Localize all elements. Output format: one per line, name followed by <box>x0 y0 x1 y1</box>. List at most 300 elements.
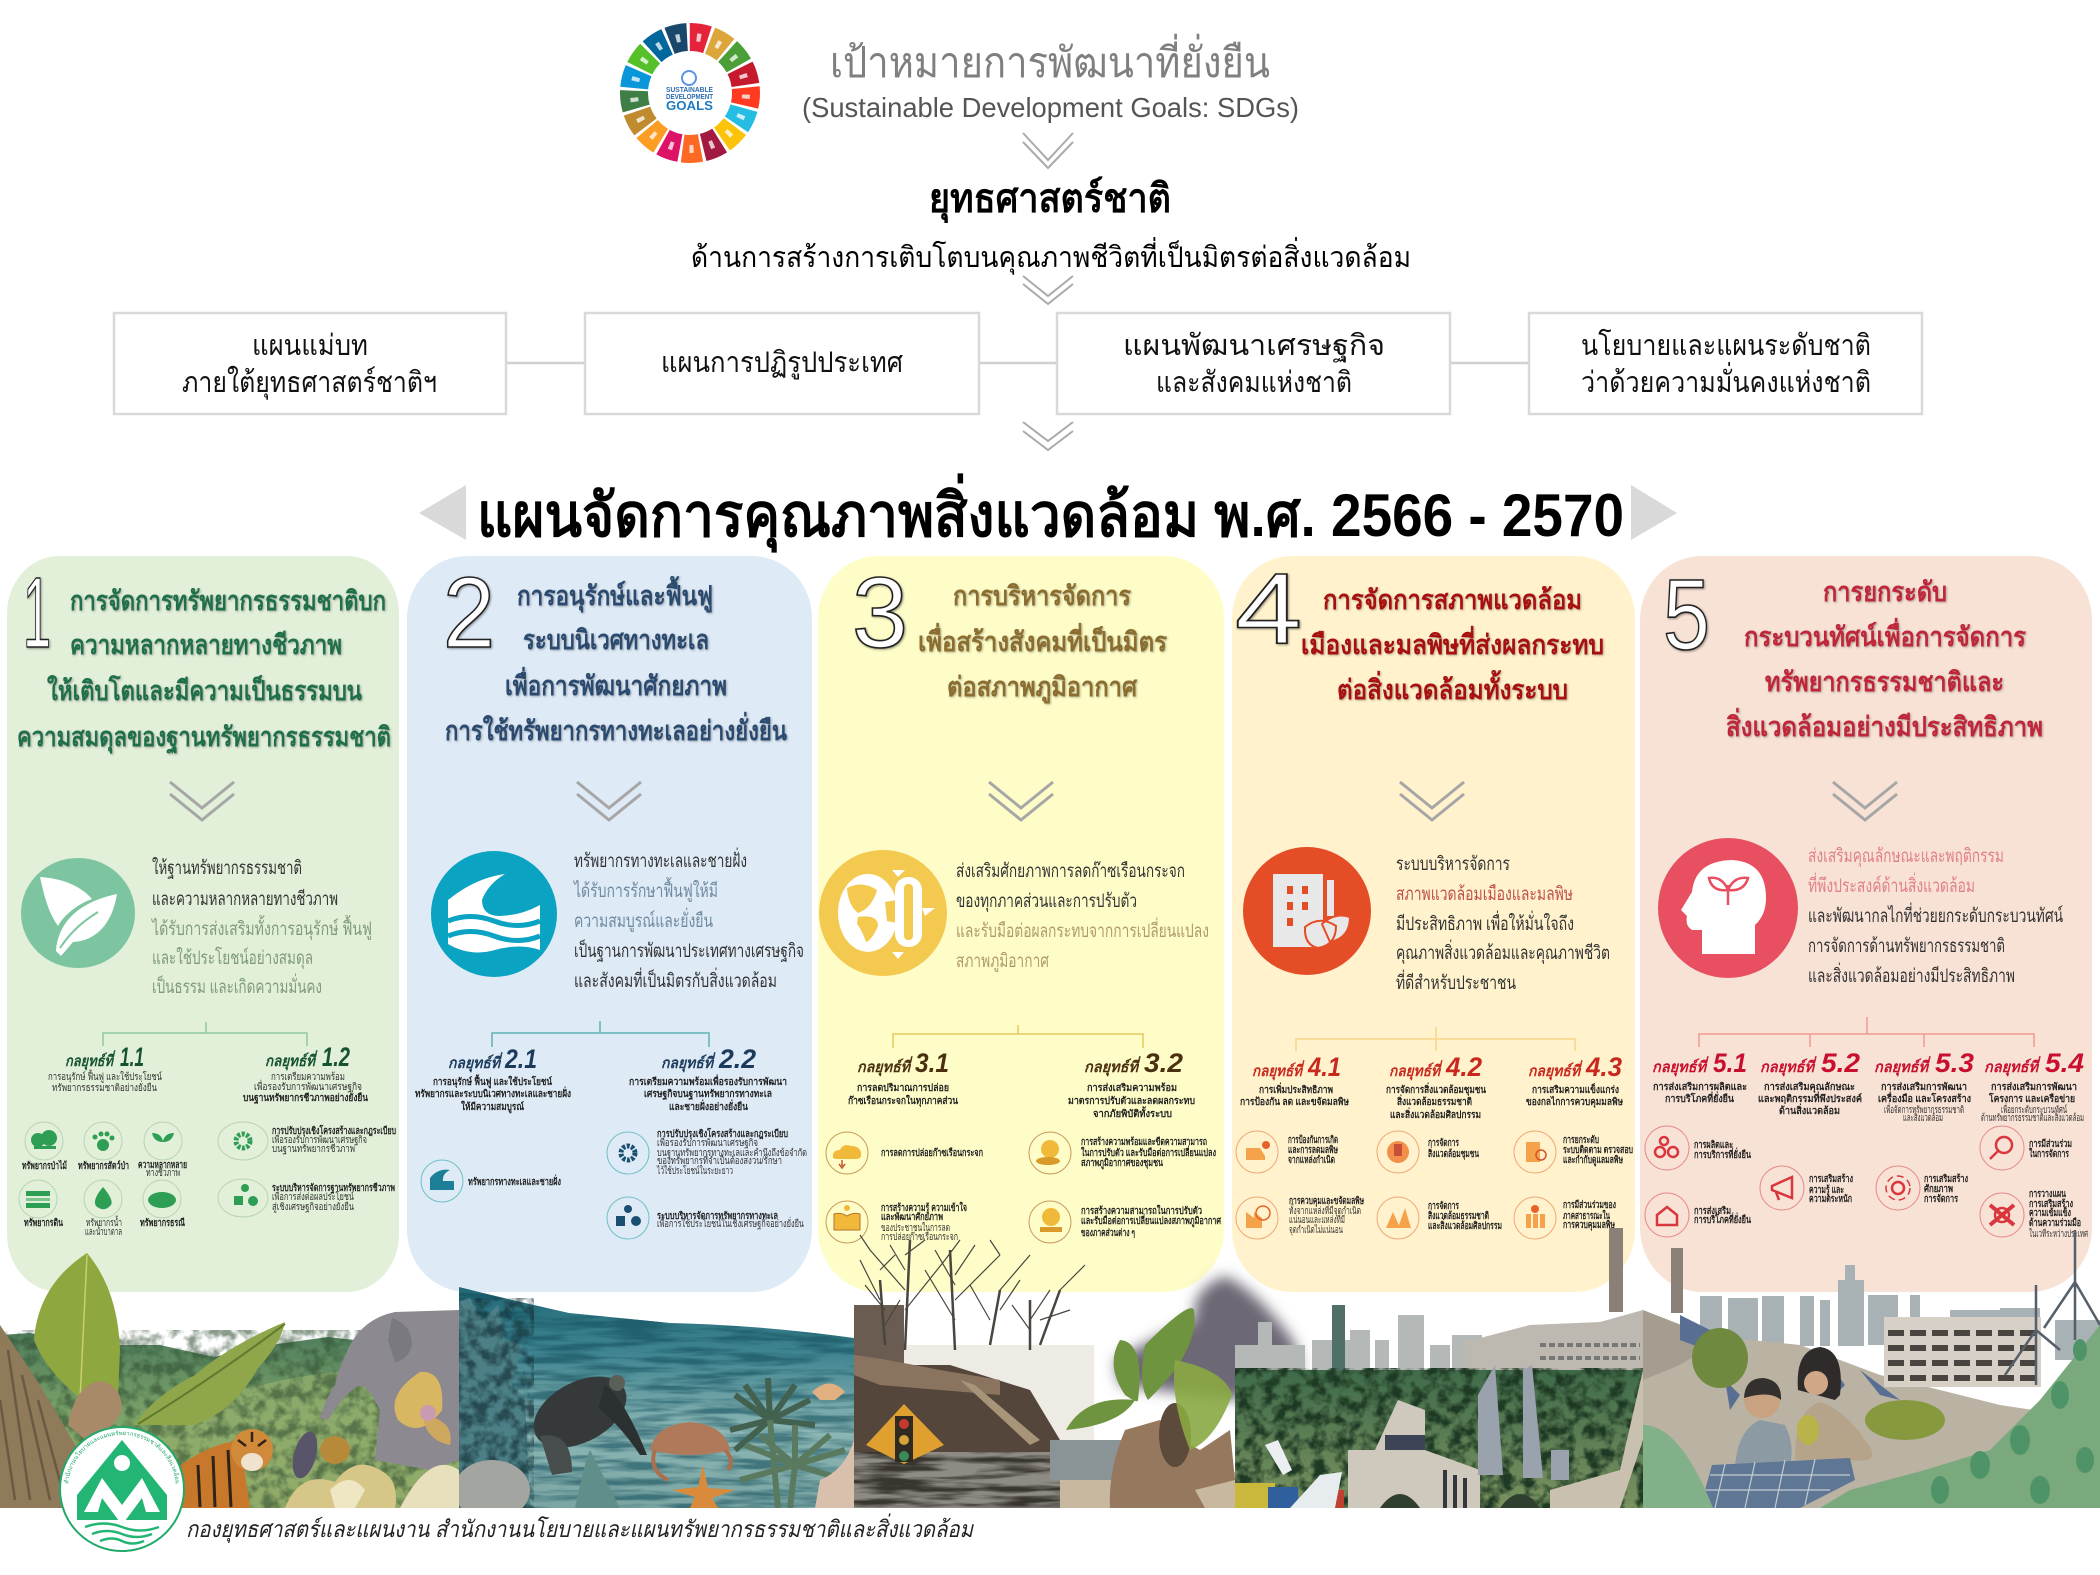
strategy 2.1 <box>415 1044 571 1114</box>
water texture <box>854 1452 1144 1508</box>
text: marine resource management: ระบบบริหารจัดการทรัพยากรทางทะเล <box>657 1210 778 1222</box>
body text panel 3: และรับมือต่อผลกระทบจากการเปลี่ยนแปลง <box>956 917 1209 942</box>
text: structural regulation: เพื่อรองรับการพัฒนาเศรษฐกิจ <box>657 1135 758 1149</box>
text: sector capacity: การสร้างความสามารถในการปรับตัว <box>1081 1204 1202 1217</box>
strategy 3.1: 3.1 <box>915 1048 949 1078</box>
text: pollution control: ทั้งจากแหล่งที่มีจุดกำเนิด <box>1289 1203 1361 1217</box>
heading panel 2 <box>445 575 787 746</box>
panel 5: paradigm shift <box>1640 556 2092 1292</box>
strategy 3.1: กลยุทธ์ที่ <box>857 1056 913 1077</box>
tree connector panel 3 <box>893 1025 1143 1048</box>
tiger <box>175 1429 273 1508</box>
panel 4: urban environment and pollution <box>1232 553 1635 1292</box>
body text panel 1 <box>151 857 372 998</box>
text: monitoring upgrade: การยกระดับ <box>1563 1134 1599 1146</box>
body text panel 2: และสังคมที่เป็นมิตรกับสิ่งแวดล้อม <box>574 967 777 992</box>
cracked ground <box>1060 1472 1235 1508</box>
body text panel 5 <box>1808 846 2063 987</box>
heading panel 3: ต่อสภาพภูมิอากาศ <box>947 672 1138 704</box>
box: reform plan <box>585 313 979 414</box>
box: economic and social plan: แผนพัฒนาเศรษฐกิจ <box>1123 330 1385 363</box>
elephant ear <box>388 1318 412 1362</box>
subheading: strategy topic: ด้านการสร้างการเติบโตบนคุณภาพชีวิตที่เป็นมิตรต่อสิ่งแวดล้อม <box>691 237 1411 275</box>
strategy 5.3: และสิ่งแวดล้อม <box>1903 1110 1943 1124</box>
text: community capacity: การสร้างความพร้อมและขีดความสามารถ <box>1081 1136 1207 1148</box>
bee <box>288 1429 350 1481</box>
banana leaf upright <box>34 1253 120 1400</box>
text: knowledge building <box>881 1201 967 1243</box>
coral bottom <box>454 1460 530 1520</box>
strategy 5.1 <box>1652 1048 1747 1105</box>
turtle <box>522 1362 647 1475</box>
strategy 3.2: มาตรการปรับตัวและลดผลกระทบ <box>1068 1095 1195 1107</box>
rooftop left <box>1643 1310 1720 1380</box>
strategy 3.2 <box>1068 1048 1195 1120</box>
strategy 5.2 <box>1758 1048 1862 1117</box>
body text panel 2 <box>573 847 804 992</box>
SDG wheel logo: DEVELOPMENT <box>666 94 714 101</box>
text: international cooperation <box>2029 1189 2088 1240</box>
strategy 1.1: ทรัพยากรธรรมชาติอย่างยั่งยืน <box>52 1080 157 1094</box>
body text panel 4: ระบบบริหารจัดการ <box>1396 854 1510 875</box>
text: pollution control <box>1289 1195 1364 1236</box>
text: biological resource management: เพื่อการส่งต่อผลประโยชน์ <box>272 1189 354 1203</box>
photo collage: ocean and marine life <box>454 1287 854 1520</box>
strategy 2.1: การอนุรักษ์ ฟื้นฟู และใช้ประโยชน์ <box>433 1074 552 1089</box>
heading panel 3: เพื่อสร้างสังคมที่เป็นมิตร <box>918 622 1167 657</box>
text: knowledge and awareness: ความรู้ และ <box>1809 1184 1844 1197</box>
light backdrop blending into smoke <box>854 1345 1094 1508</box>
strategy 2.1: ให้มีความสมบูรณ์ <box>461 1100 525 1114</box>
icon: marine resources <box>421 1160 463 1202</box>
heading panel 3: การบริหารจัดการ <box>953 581 1131 611</box>
strategy 5.3: 5.3 <box>1935 1048 1974 1078</box>
box: master plan: แผนแม่บท <box>252 330 368 362</box>
strategy 5.3 <box>1874 1048 1974 1124</box>
text: pollution prevention: จากแหล่งกำเนิด <box>1288 1154 1335 1166</box>
text: sustainable production: การบริการที่ยั่งยืน <box>1694 1147 1751 1161</box>
tree connector panel 2 <box>492 1021 709 1047</box>
SDG wheel logo: GOALS <box>666 98 713 113</box>
strategy 5.3: เครื่องมือ และโครงสร้าง <box>1878 1091 1971 1105</box>
skyscrapers <box>1478 1365 1569 1480</box>
resource icons grid <box>19 1122 187 1238</box>
text: public participation <box>1563 1199 1616 1231</box>
seaweed <box>575 1450 620 1508</box>
tree connector panel 5 <box>1699 1017 2034 1047</box>
text: knowledge and awareness: การเสริมสร้าง <box>1809 1173 1853 1185</box>
strategy 2.2: เศรษฐกิจบนฐานทรัพยากรทางทะเล <box>644 1088 772 1100</box>
text: management capacity: การเสริมสร้าง <box>1924 1173 1968 1185</box>
text: sector capacity <box>1081 1204 1221 1239</box>
text: community environment <box>1428 1137 1479 1160</box>
strategy 2.1: 2.1 <box>504 1044 537 1074</box>
strategy 3.1: การลดปริมาณการปล่อย <box>857 1082 949 1094</box>
text: biological resource management: ระบบบริหารจัดการฐานทรัพยากรชีวภาพ <box>272 1182 395 1194</box>
strategy 4.3: 4.3 <box>1585 1052 1622 1082</box>
text: structure and regulation: การปรับปรุงเชิงโครงสร้างและกฎระเบียบ <box>272 1124 396 1137</box>
strategy 5.2: 5.2 <box>1821 1048 1860 1078</box>
strategy 5.4: 5.4 <box>2045 1048 2084 1078</box>
text: international cooperation: การวางแผน <box>2029 1189 2066 1200</box>
text: pollution prevention <box>1288 1134 1338 1166</box>
text: management capacity: การจัดการ <box>1924 1193 1958 1205</box>
chimney right <box>1671 1248 1683 1313</box>
heading panel 3 <box>918 581 1167 704</box>
diagonal leaf vein <box>138 1324 285 1424</box>
trunk bark <box>0 1350 65 1500</box>
box: national security policy: ว่าด้วยความมั่นคงแห่งชาติ <box>1581 362 1871 399</box>
strategy 5.3: กลยุทธ์ที่ <box>1874 1056 1931 1077</box>
strategy 4.2: สิ่งแวดล้อมธรรมชาติ <box>1397 1094 1472 1108</box>
strategy 2.2: และชายฝั่งอย่างยั่งยืน <box>669 1099 748 1113</box>
text: community environment: การจัดการ <box>1428 1137 1459 1149</box>
body text panel 4: มีประสิทธิภาพ เพื่อให้มั่นใจถึง <box>1396 910 1574 935</box>
arrow panel 4 <box>1400 782 1464 820</box>
strategy 1.2: เพื่อรองรับการพัฒนาเศรษฐกิจ <box>254 1079 362 1093</box>
number 4: 4 <box>1235 553 1302 665</box>
strategy 5.4 <box>1981 1048 2084 1124</box>
text: structural regulation: ไว้ใช้ประโยชน์ในระยะยาว <box>656 1164 733 1177</box>
banana leaf vein <box>80 1255 87 1400</box>
heading panel 1: การจัดการทรัพยากรธรรมชาติบก <box>70 586 386 616</box>
heading panel 2: เพื่อการพัฒนาศักยภาพ <box>505 666 727 701</box>
icon: management 1.2 <box>218 1179 268 1217</box>
heading panel 5: การยกระดับ <box>1823 577 1947 607</box>
rock <box>815 1440 854 1508</box>
dark trees foreground <box>1380 1494 1540 1508</box>
body text panel 2: ความสมบูรณ์และยั่งยืน <box>574 907 713 932</box>
text: management capacity <box>1924 1173 1968 1205</box>
plant leaves <box>1066 1308 1232 1450</box>
heading panel 5: ทรัพยากรธรรมชาติและ <box>1765 667 2004 697</box>
rooftops <box>1643 1310 2100 1508</box>
text: knowledge and awareness <box>1809 1173 1853 1205</box>
strategy 2.2: กลยุทธ์ที่ <box>661 1052 716 1073</box>
tall tower <box>1332 1305 1345 1373</box>
strategy 5.4: โครงการ และเครือข่าย <box>1988 1092 2075 1105</box>
body text panel 1: และใช้ประโยชน์อย่างสมดุล <box>152 946 313 970</box>
text: participation in management: ในการจัดการ <box>2029 1147 2069 1160</box>
tube <box>1265 1440 1292 1475</box>
wind turbines <box>2005 1230 2100 1385</box>
arrow panel 5 <box>1833 782 1897 820</box>
leaf clusters <box>1931 1339 2094 1504</box>
coral fronds <box>459 1298 530 1508</box>
text: sector capacity: และรับมือต่อการเปลี่ยนแปลงสภาพภูมิอากาศ <box>1081 1213 1221 1228</box>
collapsed planks <box>960 1380 1040 1445</box>
text: reduce greenhouse gas: การลดการปล่อยก๊าซเรือนกระจก <box>881 1147 983 1159</box>
panel 2: marine ecosystem <box>407 556 812 1292</box>
number 1: 1 <box>23 557 51 669</box>
resource icons grid: ทรัพยากรธรณี <box>140 1217 186 1229</box>
text: monitoring upgrade: และกำกับดูแลมลพิษ <box>1563 1154 1623 1167</box>
crab <box>650 1422 731 1480</box>
tower structure <box>854 1305 904 1365</box>
text: community capacity <box>1081 1136 1216 1170</box>
strategy 4.3: การเสริมความแข็งแกร่ง <box>1532 1082 1619 1096</box>
text: biological resource management: สู่เชิงเศรษฐกิจอย่างยั่งยืน <box>272 1199 354 1213</box>
body text panel 2: ทรัพยากรทางทะเลและชายฝั่ง <box>574 847 747 872</box>
factory <box>1465 1310 1643 1375</box>
body text panel 3: ของทุกภาคส่วนและการปรับตัว <box>956 891 1137 913</box>
icon: gears 2.2 <box>607 1132 649 1174</box>
flood water <box>854 1452 1144 1508</box>
icon: wave <box>431 851 557 977</box>
strategy 1.2: การเตรียมความพร้อม <box>271 1071 345 1083</box>
text: international cooperation: การเสริมสร้าง <box>2029 1198 2073 1210</box>
body text panel 4: ที่ดีสำหรับประชาชน <box>1396 969 1516 994</box>
strategy 5.2: การส่งเสริมคุณลักษณะ <box>1764 1081 1855 1093</box>
strategy 5.3: การส่งเสริมการพัฒนา <box>1881 1081 1967 1093</box>
arrow panel 2 <box>577 782 641 820</box>
strategy 2.2 <box>629 1044 787 1113</box>
strategy 4.2: 4.2 <box>1445 1052 1482 1082</box>
text: structure and regulation: บนฐานทรัพยากรชีวภาพ <box>272 1143 355 1155</box>
body text panel 5: ที่พึงประสงค์ด้านสิ่งแวดล้อม <box>1808 872 1975 897</box>
strategy 4.3: ของกลไกการควบคุมมลพิษ <box>1526 1095 1623 1108</box>
body text panel 5: และสิ่งแวดล้อมอย่างมีประสิทธิภาพ <box>1808 962 2015 987</box>
SDG wheel logo <box>611 14 769 172</box>
apartment windows <box>1888 1333 2036 1378</box>
text: knowledge building: และพัฒนาศักยภาพ <box>881 1211 943 1223</box>
text: knowledge and awareness: ความตระหนัก <box>1809 1193 1852 1205</box>
text: structural regulation: บนฐานทรัพยากรทางทะเลและคำนึงถึงข้อจำกัด <box>657 1147 807 1159</box>
body text panel 1: ได้รับการส่งเสริมทั้งการอนุรักษ์ ฟื้นฟู <box>151 915 372 941</box>
strategy 4.1: การเพิ่มประสิทธิภาพ <box>1259 1082 1333 1096</box>
strategy 1.2 <box>243 1042 368 1104</box>
bare tree branches <box>860 1235 1085 1350</box>
subtitle: SDGs in English: (Sustainable Development Goals: SDGs) <box>802 92 1299 123</box>
heading panel 4 <box>1301 585 1604 705</box>
resource icons grid: และน้ำบาดาล <box>85 1224 122 1238</box>
body text panel 5: ส่งเสริมคุณลักษณะและพฤติกรรม <box>1808 846 2004 868</box>
strategy 2.1: ทรัพยากรและระบบนิเวศทางทะเลและชายฝั่ง <box>415 1086 571 1100</box>
text: natural and art environment: การจัดการ <box>1428 1200 1459 1212</box>
strategy 1.1 <box>48 1042 162 1094</box>
green tree tuft <box>1692 1328 1748 1388</box>
text: sustainable production <box>1694 1139 1751 1161</box>
body text panel 2: เป็นฐานการพัฒนาประเทศทางเศรษฐกิจ <box>574 938 804 962</box>
agency logo: สำนักงานนโยบายและแผนทรัพยากรธรรมชาติและสิ่งแวดล้อม <box>64 1430 180 1484</box>
strategy 4.2: กลยุทธ์ที่ <box>1389 1060 1443 1081</box>
water patch <box>1050 1440 1130 1480</box>
strategy 1.2: บนฐานทรัพยากรชีวภาพอย่างยั่งยืน <box>243 1090 368 1104</box>
body text panel 2: ได้รับการรักษาฟื้นฟูให้มี <box>573 877 718 902</box>
panel 1: natural resources <box>7 556 399 1292</box>
strategy 2.1: กลยุทธ์ที่ <box>448 1052 503 1073</box>
text: knowledge building: ของประชาชนในการลด <box>881 1222 950 1234</box>
heading panel 5 <box>1726 577 2043 742</box>
heading panel 1: ความสมดุลของฐานทรัพยากรธรรมชาติ <box>17 722 391 755</box>
elephant <box>320 1310 459 1470</box>
palm trees <box>730 1378 845 1508</box>
heading panel 5: กระบวนทัศน์เพื่อการจัดการ <box>1744 617 2026 652</box>
tree connector panel 1 <box>103 1022 307 1046</box>
text: structure and regulation: เพื่อรองรับการพัฒนาเศรษฐกิจ <box>272 1132 367 1146</box>
strategy 4.3 <box>1526 1052 1623 1108</box>
body text panel 5: การจัดการด้านทรัพยากรธรรมชาติ <box>1808 936 2005 957</box>
resource icons grid: ทรัพยากรป่าไม้ <box>22 1159 67 1172</box>
green leaves right <box>1820 1325 2100 1508</box>
monkey <box>68 1381 122 1438</box>
icon: green city building <box>1243 847 1371 975</box>
text: pollution control: จุดกำเนิดไม่แน่นอน <box>1289 1224 1343 1236</box>
number 2: 2 <box>443 557 495 669</box>
strategy 4.1: 4.1 <box>1307 1052 1341 1082</box>
city skyline <box>1235 1315 1482 1375</box>
heading panel 4: ต่อสิ่งแวดล้อมทั้งระบบ <box>1337 669 1568 705</box>
text: pollution prevention: และการลดมลพิษ <box>1288 1144 1338 1156</box>
forest band <box>1235 1370 1643 1508</box>
icons panel 5 <box>1645 1126 2024 1237</box>
body text panel 1: ให้ฐานทรัพยากรธรรมชาติ <box>152 857 302 879</box>
box: reform plan: แผนการปฏิรูปประเทศ <box>661 347 904 380</box>
strategy 4.2: การจัดการสิ่งแวดล้อมชุมชน <box>1386 1082 1486 1096</box>
photo collage: forest and wildlife <box>0 1253 459 1508</box>
text: monitoring upgrade <box>1563 1134 1633 1167</box>
strategy 5.3: เพื่อจัดการทรัพยากรธรรมชาติ <box>1884 1102 1964 1116</box>
strategy 1.1: การอนุรักษ์ ฟื้นฟู และใช้ประโยชน์ <box>48 1069 162 1083</box>
text: public participation: การควบคุมมลพิษ <box>1563 1219 1615 1231</box>
icon: book and bulb <box>826 1201 868 1243</box>
arrow: down chevron under boxes <box>1023 422 1073 450</box>
text: monitoring upgrade: ระบบติดตาม ตรวจสอบ <box>1563 1144 1633 1156</box>
heading panel 1: ให้เติบโตและมีความเป็นธรรมบน <box>47 673 362 706</box>
text: structural regulation: การปรับปรุงเชิงโครงสร้างและกฎระเบียบ <box>657 1127 788 1140</box>
boy <box>1735 1378 1792 1466</box>
body text panel 3: ส่งเสริมศักยภาพการลดก๊าซเรือนกระจก <box>956 860 1185 882</box>
number 3: 3 <box>852 557 908 669</box>
strategy 1.1: 1.1 <box>120 1042 144 1072</box>
text: knowledge building: การปล่อยก๊าซเรือนกระจก <box>881 1231 958 1243</box>
resource icons grid: ทรัพยากรน้ำ <box>86 1215 122 1229</box>
icon: management 2.2 <box>607 1197 649 1239</box>
photo collage: climate disaster <box>854 1235 1235 1508</box>
text: structure and regulation <box>272 1124 396 1155</box>
photo collage: sustainable city and children <box>1643 1265 2100 1508</box>
icon: community adaptation <box>1029 1132 1071 1174</box>
strategy 5.2: และพฤติกรรมที่พึงประสงค์ <box>1758 1091 1862 1105</box>
text: community environment: สิ่งแวดล้อมชุมชน <box>1428 1146 1479 1160</box>
building windows <box>1445 1470 1465 1508</box>
number 5: 5 <box>1663 559 1710 671</box>
box: master plan <box>114 313 506 414</box>
text: pollution control: แน่นอนและแหล่งที่มี <box>1289 1212 1345 1226</box>
heading panel 1: ความหลากหลายทางชีวภาพ <box>70 630 342 660</box>
strategy 3.2: จากภัยพิบัติทั้งระบบ <box>1093 1106 1172 1120</box>
green tree right <box>1865 1400 1945 1440</box>
strategy 1.1: กลยุทธ์ที่ <box>65 1050 116 1071</box>
heading panel 2: การใช้ทรัพยากรทางทะเลอย่างยั่งยืน <box>445 711 787 746</box>
strategy 4.1 <box>1240 1052 1349 1108</box>
resource icons grid: ทรัพยากรดิน <box>24 1217 63 1229</box>
shell <box>812 1384 845 1400</box>
SDG wheel logo: SUSTAINABLE <box>666 87 713 94</box>
strategy 5.1: 5.1 <box>1713 1048 1747 1078</box>
strategy 3.2: การส่งเสริมความพร้อม <box>1087 1082 1177 1094</box>
box: master plan: ภายใต้ยุทธศาสตร์ชาติฯ <box>182 365 437 400</box>
text: international cooperation: ความเข้มแข็ง <box>2029 1205 2071 1219</box>
strategy 5.1: การบริโภคที่ยั่งยืน <box>1665 1091 1734 1105</box>
text: management capacity: ศักยภาพ <box>1924 1183 1953 1195</box>
strategy 4.2 <box>1386 1052 1486 1121</box>
strategy 4.2: และสิ่งแวดล้อมศิลปกรรม <box>1390 1107 1481 1121</box>
strategy 5.2: ด้านสิ่งแวดล้อม <box>1779 1103 1840 1117</box>
text: pollution control: การควบคุมและขจัดมลพิษ <box>1289 1195 1364 1207</box>
solar panel foreground <box>1700 1458 1855 1508</box>
text: natural and art environment <box>1428 1200 1502 1232</box>
strategy 4.1: การป้องกัน ลด และขจัดมลพิษ <box>1240 1096 1349 1108</box>
coral texture <box>459 1298 534 1508</box>
plastic bottle <box>1290 1472 1342 1508</box>
text: marine resource management <box>657 1210 804 1230</box>
text: biological resource management <box>272 1182 395 1213</box>
soil <box>1159 1403 1191 1467</box>
heading panel 4: เมืองและมลพิษที่ส่งผลกระทบ <box>1301 625 1604 660</box>
icon: sector adaptation <box>1029 1201 1071 1243</box>
strategy 3.1: ก๊าซเรือนกระจกในทุกภาคส่วน <box>848 1094 958 1107</box>
tree trunk <box>0 1325 78 1508</box>
wooden house <box>854 1365 1100 1455</box>
wave texture <box>459 1287 854 1508</box>
strategy 5.1: การส่งเสริมการผลิตและ <box>1653 1081 1747 1093</box>
orchid flowers <box>285 1372 459 1508</box>
main title band: แผนจัดการคุณภาพสิ่งแวดล้อม พ.ศ. 2566 - 2570 <box>477 473 1624 553</box>
body text panel 3 <box>956 860 1209 972</box>
icon: leaves <box>21 858 135 968</box>
forest texture <box>1235 1368 1643 1508</box>
text: pollution prevention: การป้องกันการเกิด <box>1288 1134 1338 1146</box>
strategy 3.1 <box>848 1048 958 1107</box>
box: national security policy <box>1529 313 1922 414</box>
heading: national strategy: ยุทธศาสตร์ชาติ <box>929 176 1171 224</box>
body text panel 3: สภาพภูมิอากาศ <box>956 951 1049 972</box>
heading panel 1 <box>17 586 391 755</box>
strategy 5.4: การส่งเสริมการพัฒนา <box>1991 1081 2077 1093</box>
skyline back <box>1700 1265 2100 1360</box>
icon: CO2 cloud <box>826 1132 868 1174</box>
dark band <box>1385 1435 1425 1450</box>
connected plan boxes row <box>114 313 1922 414</box>
strategy 5.2: กลยุทธ์ที่ <box>1760 1056 1817 1077</box>
heading panel 2: การอนุรักษ์และฟื้นฟู <box>517 575 713 613</box>
strategy 2.2: 2.2 <box>718 1044 756 1074</box>
smoke cloud <box>1115 1276 1300 1400</box>
strategy 4.1: กลยุทธ์ที่ <box>1252 1060 1305 1081</box>
text: sector capacity: ของภาคส่วนต่าง ๆ <box>1081 1227 1135 1239</box>
text: sustainable consumption <box>1694 1205 1751 1226</box>
icon: head with sprout <box>1658 838 1798 978</box>
text: marine and coastal resources: ทรัพยากรทางทะเลและชายฝั่ง <box>468 1174 561 1188</box>
agency logo <box>59 1426 185 1552</box>
panel 3: climate <box>818 556 1224 1292</box>
roof <box>854 1355 1000 1395</box>
box: economic and social plan <box>1057 313 1450 414</box>
text: public participation: การมีส่วนร่วมของ <box>1563 1199 1616 1211</box>
body text panel 4: คุณภาพสิ่งแวดล้อมและคุณภาพชีวิต <box>1396 939 1610 965</box>
tree connector panel 4 <box>1296 1027 1575 1051</box>
body text panel 4: สภาพแวดล้อมเมืองและมลพิษ <box>1396 884 1573 905</box>
starfish <box>672 1465 735 1508</box>
white building <box>1348 1400 1480 1508</box>
strategy 3.2: 3.2 <box>1144 1048 1183 1078</box>
text: structural regulation <box>656 1127 807 1177</box>
text: marine resource management: เพื่อการใช้ประโยชน์ในเชิงเศรษฐกิจอย่างยั่งยืน <box>657 1216 804 1230</box>
solar panels roof <box>1680 1315 1900 1410</box>
box: economic and social plan: และสังคมแห่งชาติ <box>1156 367 1352 399</box>
text: public participation: ภาคสาธารณะใน <box>1563 1209 1610 1222</box>
